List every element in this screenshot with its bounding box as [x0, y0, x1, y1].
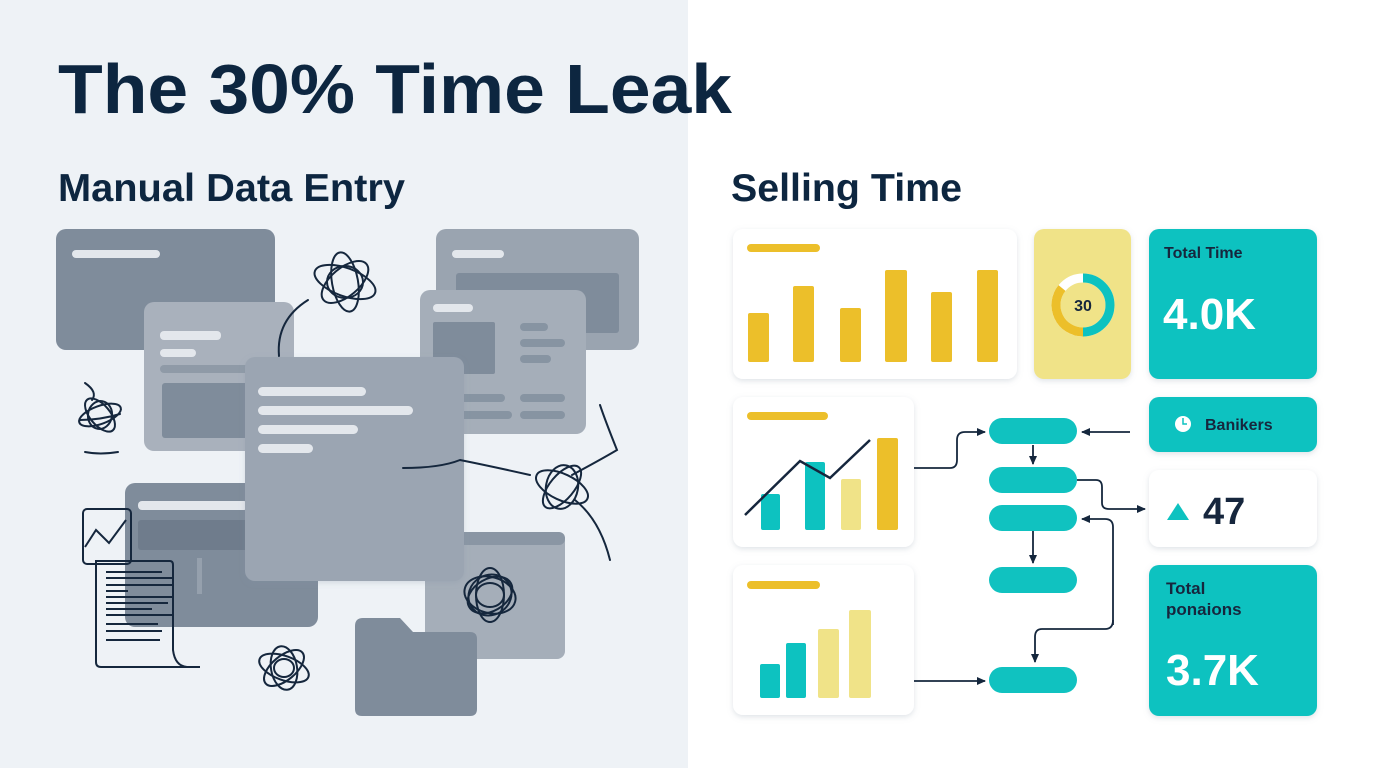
panel: manual data entry cluttered windows	[56, 229, 639, 716]
stat card: 47: 47	[1203, 491, 1245, 533]
window D	[420, 290, 586, 434]
stat card: total ponaions: ponaions	[1166, 600, 1242, 619]
stat card: total time	[1149, 229, 1317, 379]
arrows	[914, 432, 1145, 681]
flow pills	[989, 418, 1077, 693]
window G	[425, 532, 565, 659]
panel: selling time dashboard	[733, 229, 1317, 716]
icon: document with chart	[83, 509, 200, 667]
stat card: total ponaions: Total	[1166, 579, 1205, 598]
window F center	[245, 357, 464, 581]
heading: manual data entry: Manual Data Entry	[58, 167, 405, 210]
stat card: total time: 4.0K	[1163, 290, 1256, 339]
combo chart	[733, 397, 914, 547]
heading: selling time: Selling Time	[731, 167, 962, 210]
icon: folder	[355, 618, 477, 716]
stat card: total ponaions	[1149, 565, 1317, 716]
window C	[144, 302, 294, 451]
window B	[436, 229, 639, 350]
window A	[56, 229, 275, 350]
scribbles	[76, 250, 617, 693]
stat card: bankers	[1149, 397, 1317, 452]
donut card: 30: 30	[1074, 298, 1092, 315]
donut card: 30	[1034, 229, 1131, 379]
stat card: total time: Total Time	[1164, 245, 1243, 262]
title: The 30% Time Leak	[58, 50, 732, 128]
stat card: bankers: Banikers	[1205, 417, 1273, 434]
window E	[125, 483, 318, 627]
bar chart: yellow bars	[733, 229, 1017, 379]
stat card: total ponaions: 3.7K	[1166, 646, 1259, 695]
bar chart: ascending	[733, 565, 914, 715]
stat card: 47	[1149, 470, 1317, 547]
